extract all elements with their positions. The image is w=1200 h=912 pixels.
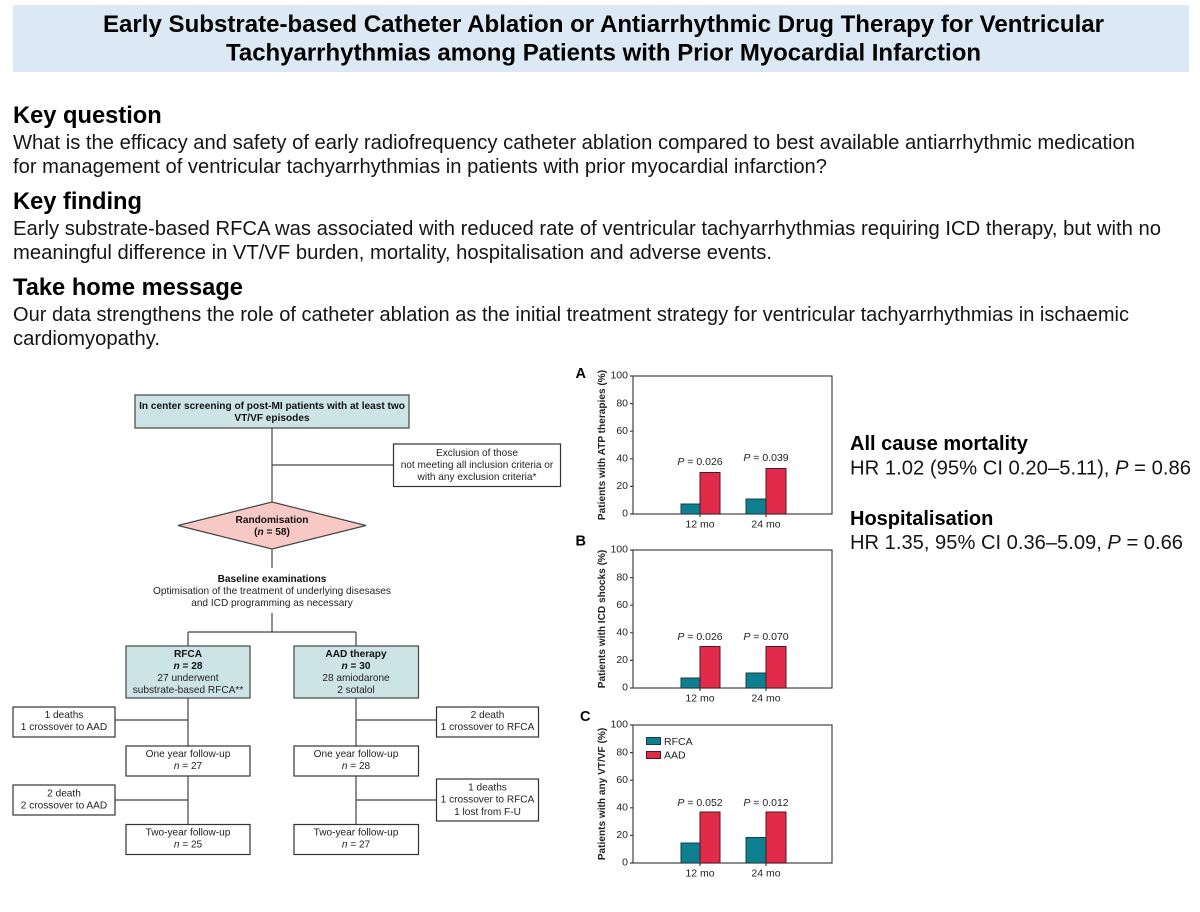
AAD arm box (294, 646, 418, 698)
bar chart A: ATP therapies: 60 (616, 425, 628, 437)
bar chart B: ICD shocks (576, 534, 832, 704)
baseline examinations text: and ICD programming as necessary (191, 598, 354, 609)
text block: key question: What is the efficacy and safety of early radiofrequency catheter ablation compared to best available antiarrhythmic medication (13, 132, 1135, 154)
bar chart C: any VT/VF: 20 (616, 829, 628, 841)
bar chart A: ATP therapies: P = 0.026 (677, 456, 723, 468)
bar chart C: any VT/VF: 80 (616, 746, 628, 758)
RFCA two-year follow-up: n = 25 (174, 840, 203, 850)
screening box: In center screening of post-MI patients with at least two (139, 401, 405, 412)
AAD two-year follow-up (294, 824, 418, 854)
RFCA second-year losses (13, 785, 115, 815)
bar chart A: ATP therapies: 100 (610, 370, 628, 382)
outcome: hospitalisation (850, 508, 1183, 554)
bar chart B: ICD shocks: 24 mo (751, 692, 781, 704)
screening box (135, 395, 409, 428)
AAD second-year losses (436, 779, 538, 821)
text block: key question: for management of ventricular tachyarrhythmias in patients with prior myocardial infarction? (13, 156, 827, 178)
AAD first-year losses: 1 crossover to RFCA (441, 722, 535, 733)
AAD second-year losses: 1 lost from F-U (454, 807, 521, 818)
chart legend: RFCA (664, 736, 693, 748)
baseline examinations text: Baseline examinations (218, 574, 327, 585)
bar chart C: any VT/VF: P = 0.012 (743, 797, 789, 809)
RFCA arm box: 27 underwent (157, 673, 219, 684)
bar chart C: any VT/VF (580, 709, 832, 880)
bar chart B: ICD shocks: B (576, 534, 586, 550)
text block: key finding (13, 189, 1161, 264)
bar chart A: ATP therapies (576, 366, 832, 530)
AAD one year follow-up: One year follow-up (314, 749, 399, 760)
chart legend (646, 736, 693, 762)
bar chart A: ATP therapies: 0 (622, 508, 628, 520)
outcome: hospitalisation: Hospitalisation (850, 508, 993, 530)
bar chart C: any VT/VF: 40 (616, 802, 628, 814)
AAD arm box: 2 sotalol (337, 685, 375, 696)
flowchart: trial design (13, 395, 560, 854)
AAD arm box: 28 amiodarone (322, 673, 390, 684)
text block: take home message: cardiomyopathy. (13, 328, 160, 350)
bar chart B: ICD shocks: 80 (616, 572, 628, 584)
RFCA second-year losses: 2 crossover to AAD (21, 800, 107, 812)
bar chart B: ICD shocks: Patients with ICD shocks (%) (597, 550, 608, 688)
exclusion box (394, 444, 560, 486)
RFCA second-year losses: 2 death (47, 788, 81, 800)
AAD arm box: n = 30 (342, 661, 371, 672)
outcome: hospitalisation: HR 1.35, 95% CI 0.36–5.09, P = 0.66 (850, 532, 1183, 554)
bar chart A: ATP therapies: 40 (616, 452, 628, 464)
RFCA one year follow-up: n = 27 (174, 761, 203, 772)
AAD first-year losses: 2 death (471, 710, 504, 721)
text block: key finding: Early substrate-based RFCA was associated with reduced rate of ventricular tachyarrhythmias requiring ICD therapy, but with no (13, 218, 1161, 240)
RFCA arm box (126, 646, 250, 698)
AAD two-year follow-up: n = 27 (342, 840, 371, 850)
title banner: Early Substrate-based Catheter Ablation or Antiarrhythmic Drug Therapy for Ventricular (103, 11, 1104, 38)
RFCA first-year losses: 1 crossover to AAD (21, 722, 107, 733)
bar chart A: ATP therapies: A (576, 366, 586, 382)
outcome: all cause mortality (850, 433, 1191, 480)
RFCA one year follow-up (126, 746, 250, 776)
text block: take home message: Take home message (13, 275, 243, 301)
bar chart B: ICD shocks: 20 (616, 654, 628, 666)
bar chart A: ATP therapies: P = 0.039 (743, 452, 789, 464)
title banner (13, 5, 1189, 72)
outcome: all cause mortality: All cause mortality (850, 433, 1029, 455)
text block: take home message (13, 275, 1129, 350)
outcome: all cause mortality: HR 1.02 (95% CI 0.20–5.11), P = 0.86 (850, 458, 1191, 480)
text block: key question: Key question (13, 103, 162, 129)
bar chart B: ICD shocks: 100 (610, 544, 628, 556)
bar chart B: ICD shocks: 60 (616, 599, 628, 611)
randomisation diamond (178, 502, 366, 549)
text block: key question (13, 103, 1135, 178)
AAD first-year losses (436, 707, 538, 737)
randomisation diamond: Randomisation (236, 515, 308, 526)
RFCA arm box: n = 28 (174, 661, 203, 672)
exclusion box: Exclusion of those (436, 448, 518, 459)
exclusion box: not meeting all inclusion criteria or (401, 460, 554, 471)
RFCA arm box: RFCA (174, 649, 203, 660)
bar chart B: ICD shocks: P = 0.070 (743, 631, 789, 643)
text block: take home message: Our data strengthens the role of catheter ablation as the initial treatment strategy for ventricular tachyarrhythmias in ischaemic (13, 304, 1129, 326)
randomisation diamond: (n = 58) (254, 527, 290, 538)
bar chart B: ICD shocks: 40 (616, 626, 628, 638)
bar chart C: any VT/VF: 24 mo (751, 868, 781, 880)
RFCA two-year follow-up (126, 824, 250, 854)
bar chart C: any VT/VF: 100 (610, 718, 628, 730)
bar chart B: ICD shocks: P = 0.026 (677, 631, 723, 643)
bar chart C: any VT/VF: 0 (622, 856, 628, 868)
text block: key finding: meaningful difference in VT/VF burden, mortality, hospitalisation and adverse events. (13, 242, 772, 264)
RFCA first-year losses (13, 707, 115, 737)
RFCA first-year losses: 1 deaths (45, 710, 83, 721)
baseline examinations text (153, 574, 391, 609)
bar chart C: any VT/VF: 12 mo (685, 868, 715, 880)
AAD two-year follow-up: Two-year follow-up (314, 828, 399, 838)
exclusion box: with any exclusion criteria* (417, 472, 537, 483)
title banner: Tachyarrhythmias among Patients with Prior Myocardial Infarction (226, 40, 981, 66)
bar chart C: any VT/VF: Patients with any VT/VF (%) (597, 728, 608, 860)
AAD second-year losses: 1 crossover to RFCA (441, 794, 535, 806)
RFCA two-year follow-up: Two-year follow-up (146, 828, 231, 838)
AAD second-year losses: 1 deaths (468, 782, 507, 794)
RFCA arm box: substrate-based RFCA** (133, 685, 243, 696)
baseline examinations text: Optimisation of the treatment of underlying disesases (153, 586, 391, 597)
text block: key finding: Key finding (13, 189, 142, 215)
bar chart C: any VT/VF: P = 0.052 (677, 797, 723, 809)
bar chart B: ICD shocks: 0 (622, 682, 628, 694)
bar chart B: ICD shocks: 12 mo (685, 692, 715, 704)
AAD one year follow-up: n = 28 (342, 761, 371, 772)
bar chart A: ATP therapies: Patients with ATP therapies (%) (597, 370, 608, 520)
AAD arm box: AAD therapy (325, 649, 387, 660)
bar chart A: ATP therapies: 20 (616, 480, 628, 492)
RFCA one year follow-up: One year follow-up (146, 749, 231, 760)
screening box: VT/VF episodes (234, 413, 310, 424)
bar chart C: any VT/VF: C (580, 709, 591, 725)
AAD one year follow-up (294, 746, 418, 776)
flowchart connectors (115, 428, 436, 824)
bar chart C: any VT/VF: 60 (616, 774, 628, 786)
bar chart A: ATP therapies: 12 mo (685, 518, 715, 530)
bar chart A: ATP therapies: 80 (616, 398, 628, 410)
chart legend: AAD (664, 750, 686, 762)
bar chart A: ATP therapies: 24 mo (751, 518, 781, 530)
